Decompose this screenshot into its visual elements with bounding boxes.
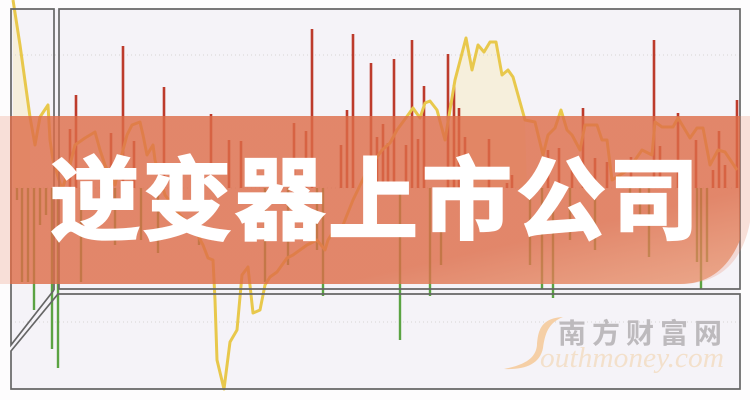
frame: lower panel xyxy=(11,294,740,389)
title: 逆变器上市公司 xyxy=(50,152,699,252)
icon: S swoosh xyxy=(504,317,563,369)
watermark: domain: outhmoney.com xyxy=(540,343,724,374)
bar chart: green falling bars xyxy=(17,188,707,368)
bar chart: red rising bars xyxy=(70,29,737,188)
yellow line area fill xyxy=(13,0,527,188)
watermark: southmoney logo xyxy=(504,317,724,374)
frame: main upper panel xyxy=(59,9,740,289)
frame: left narrow panel xyxy=(11,9,54,345)
title band xyxy=(0,116,750,284)
watermark: Chinese name: 南方财富网 xyxy=(558,317,722,349)
